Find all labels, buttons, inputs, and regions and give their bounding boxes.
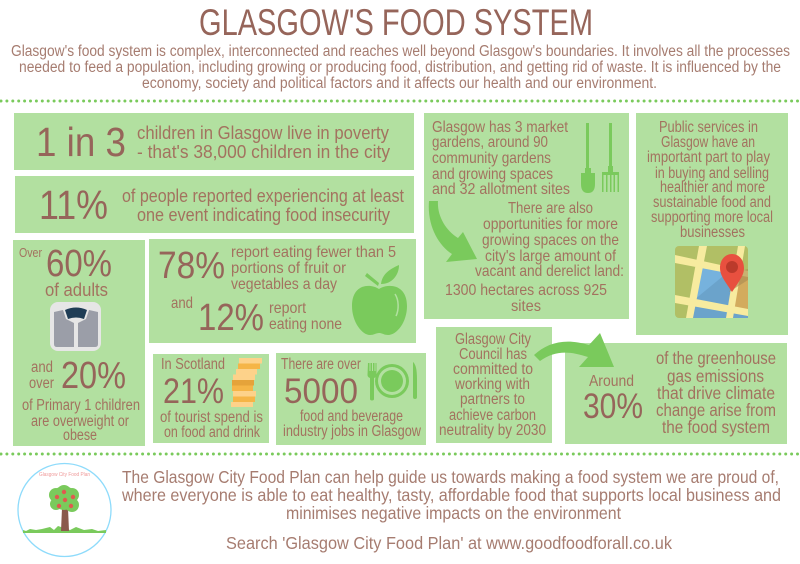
text: and over: and (31, 359, 53, 376)
text: gardens: and growing spaces (432, 166, 553, 183)
text: vacant land: growing spaces on the (482, 232, 619, 249)
text: council commitment: committed to (453, 361, 533, 378)
text: public services detail: in buying and selling (655, 165, 769, 182)
text: jobs detail (283, 408, 422, 440)
text: child poverty detail: - that's 38,000 children in the city (137, 142, 390, 162)
arrow: curved down to land text (429, 201, 477, 262)
text: tourist spend detail (160, 409, 263, 441)
text: gardens: gardens, around 90 (432, 134, 548, 151)
footer text: minimises negative impacts on the environment (286, 503, 621, 523)
stat: 20%: 20% (61, 355, 126, 397)
icon: plate and cutlery (368, 362, 417, 400)
text: council commitment: Glasgow City (455, 331, 531, 348)
text: council commitment: working with (454, 376, 530, 393)
text: primary 1 children: obese (63, 427, 97, 444)
text: vacant land: 1300 hectares across 925 (445, 282, 607, 299)
text: vacant land (445, 200, 624, 315)
stat: 30%: 30% (583, 387, 643, 426)
icon: trowel and fork (581, 123, 619, 193)
panel: industry jobs (276, 353, 426, 445)
stat: 78%: 78% (158, 245, 225, 287)
text: gardens: Glasgow has 3 market (432, 119, 568, 136)
panel: child poverty (14, 113, 414, 170)
text: emissions detail (656, 348, 776, 437)
footer text (121, 467, 781, 553)
title: GLASGOW'S FOOD SYSTEM (199, 2, 593, 43)
text: report eating none: report (269, 300, 306, 317)
text: public services detail: Public services in (659, 119, 758, 136)
text: emissions detail: of the greenhouse (656, 348, 776, 368)
text: and over (29, 359, 54, 392)
text: public services detail: supporting more local (651, 209, 773, 226)
text: public services detail: businesses (680, 224, 745, 241)
text: gardens (432, 119, 570, 198)
text: food insecurity detail: one event indicating food insecurity (137, 205, 390, 225)
panel: growing spaces (424, 113, 629, 319)
panel: tourist spend (153, 354, 269, 443)
text: emissions detail: change arise from (656, 400, 776, 420)
text: there are over: There are over (281, 356, 361, 373)
text: tourist spend detail: on food and drink (164, 424, 260, 441)
intro paragraph: economy, society and political factors and it affects our health and our environment. (142, 75, 657, 92)
text: jobs detail: industry jobs in Glasgow (283, 423, 422, 440)
panel: carbon neutrality (436, 327, 552, 443)
text: emissions detail: the food system (662, 417, 770, 437)
arrow: council to emissions (534, 333, 614, 367)
intro paragraph (11, 43, 790, 92)
stat: 5000: 5000 (284, 372, 358, 411)
text: and: and (171, 295, 193, 312)
grass (23, 526, 106, 533)
icon: map with pin (675, 246, 748, 318)
panel: food insecurity (15, 176, 414, 233)
panel: fruit and vegetables (149, 239, 416, 343)
text: public services detail: important part to play (647, 149, 770, 166)
footer text: Search 'Glasgow City Food Plan' at www.goodfoodforall.co.uk (226, 533, 672, 553)
text: vacant land: vacant and derelict land: (475, 263, 624, 280)
text: tourist spend detail: of tourist spend is (160, 409, 263, 426)
stat: 1 in 3: 1 in 3 (36, 119, 126, 165)
panel: public services (636, 113, 788, 335)
stat: 11%: 11% (39, 182, 108, 228)
text: child poverty detail: children in Glasgow live in poverty (137, 123, 389, 143)
logo: Glasgow City Food Plan (18, 464, 111, 556)
text: council commitment: neutrality by 2030 (439, 422, 546, 439)
icon: weighing scale (50, 302, 101, 351)
text: over: Over (19, 245, 43, 260)
text: fewer than 5 portions: portions of fruit or (231, 260, 347, 277)
stat: 21%: 21% (163, 372, 224, 411)
text: public services detail (647, 119, 773, 241)
text: report eating none (269, 300, 342, 333)
text: around: Around (589, 373, 634, 390)
text: fewer than 5 portions: vegetables a day (231, 276, 337, 293)
text: and over: over (29, 375, 54, 392)
text: jobs detail: food and beverage (300, 408, 403, 425)
panel: greenhouse gas (565, 343, 787, 444)
stat: 12%: 12% (198, 297, 264, 339)
text: vacant land: There are also (508, 200, 593, 217)
text: child poverty detail (137, 123, 390, 162)
icon: apple (352, 265, 407, 335)
text: council commitment (439, 331, 546, 439)
text: fewer than 5 portions (231, 244, 396, 293)
text: food insecurity detail (122, 186, 404, 225)
text: vacant land: opportunities for more (483, 216, 618, 233)
stat: 60%: 60% (46, 243, 112, 285)
text: primary 1 children: are overweight or (31, 413, 129, 430)
text: public services detail: Glasgow have an (661, 134, 755, 151)
panel: overweight (13, 240, 145, 446)
text: public services detail: sustainable food and (653, 194, 771, 211)
text: public services detail: healthier and more (660, 179, 765, 196)
text: gardens: and 32 allotment sites (432, 181, 570, 198)
text: report eating none: eating none (269, 316, 342, 333)
text: vacant land: sites (511, 298, 541, 315)
trunk (61, 508, 69, 531)
text: of adults: of adults (45, 280, 108, 300)
text: emissions detail: gas emissions (667, 366, 764, 386)
text: food insecurity detail: of people reported experiencing at least (122, 186, 404, 206)
text: primary 1 children (22, 397, 140, 444)
text: primary 1 children: of Primary 1 children (22, 397, 140, 414)
text: gardens: community gardens (432, 150, 551, 167)
logo text: Glasgow City Food Plan (39, 472, 90, 478)
icon: stacked coins (231, 358, 262, 407)
text: in Scotland: In Scotland (161, 356, 225, 373)
text: council commitment: partners to (460, 391, 525, 408)
text: emissions detail: that drive climate (657, 383, 775, 403)
canopy with apples (49, 485, 79, 512)
text: fewer than 5 portions: report eating fewer than 5 (231, 244, 396, 261)
text: council commitment: achieve carbon (449, 407, 536, 424)
text: council commitment: Council has (459, 346, 527, 363)
text: vacant land: city's large amount of (485, 248, 616, 265)
